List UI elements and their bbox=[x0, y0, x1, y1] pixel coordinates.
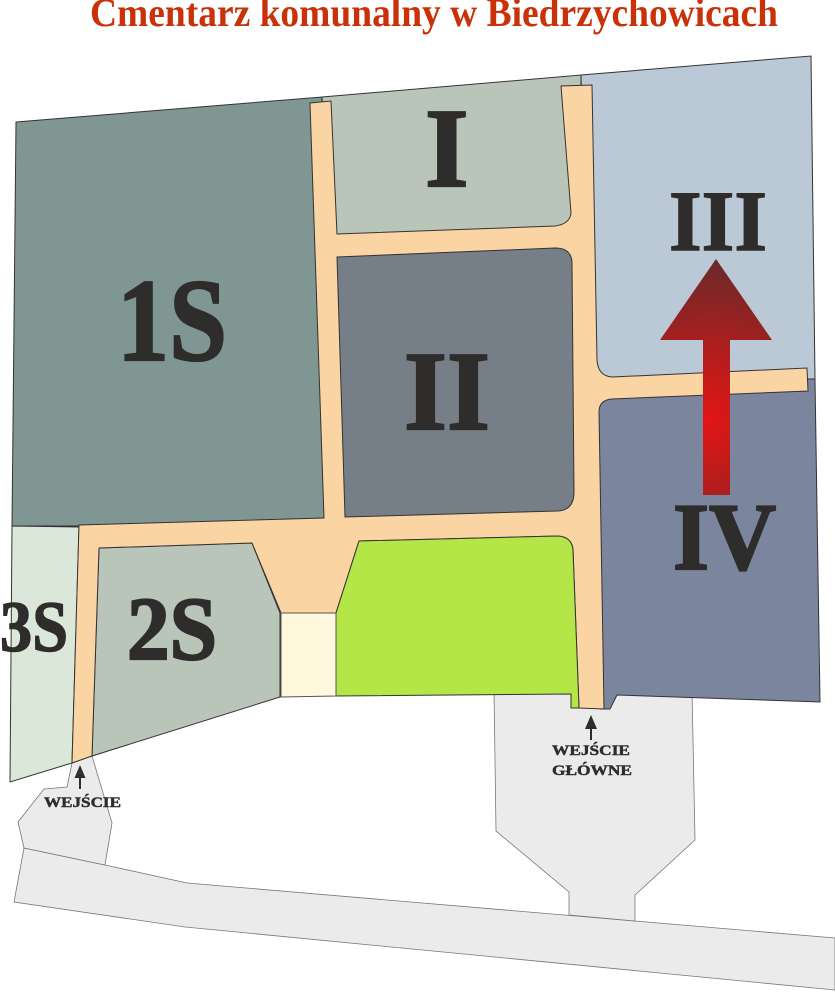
label IV: IV bbox=[673, 484, 776, 590]
left entrance label: WEJŚCIE bbox=[44, 794, 121, 811]
main entrance label bbox=[552, 742, 632, 779]
left entrance arrow bbox=[74, 765, 86, 789]
main entrance area bbox=[494, 690, 695, 921]
section IV bbox=[596, 379, 820, 709]
label II: II bbox=[404, 330, 490, 454]
access road bbox=[14, 848, 835, 990]
paths bbox=[72, 85, 808, 763]
section 1S bbox=[12, 97, 330, 526]
main entrance label: WEJŚCIE bbox=[552, 742, 630, 759]
section I bbox=[322, 75, 581, 240]
label 2S: 2S bbox=[127, 580, 217, 679]
left entrance area bbox=[18, 756, 112, 865]
label 3S: 3S bbox=[0, 587, 68, 667]
chapel square bbox=[281, 613, 336, 697]
label 1S: 1S bbox=[117, 255, 227, 386]
red direction arrow bbox=[660, 259, 772, 495]
main entrance arrow bbox=[585, 715, 597, 740]
green section bbox=[336, 536, 579, 708]
main entrance label: GŁÓWNE bbox=[552, 762, 632, 779]
label III: III bbox=[669, 173, 767, 269]
section III bbox=[581, 56, 815, 382]
section 2S bbox=[92, 543, 280, 756]
section 3S bbox=[10, 526, 79, 782]
label I: I bbox=[425, 87, 469, 211]
section II bbox=[337, 248, 574, 517]
